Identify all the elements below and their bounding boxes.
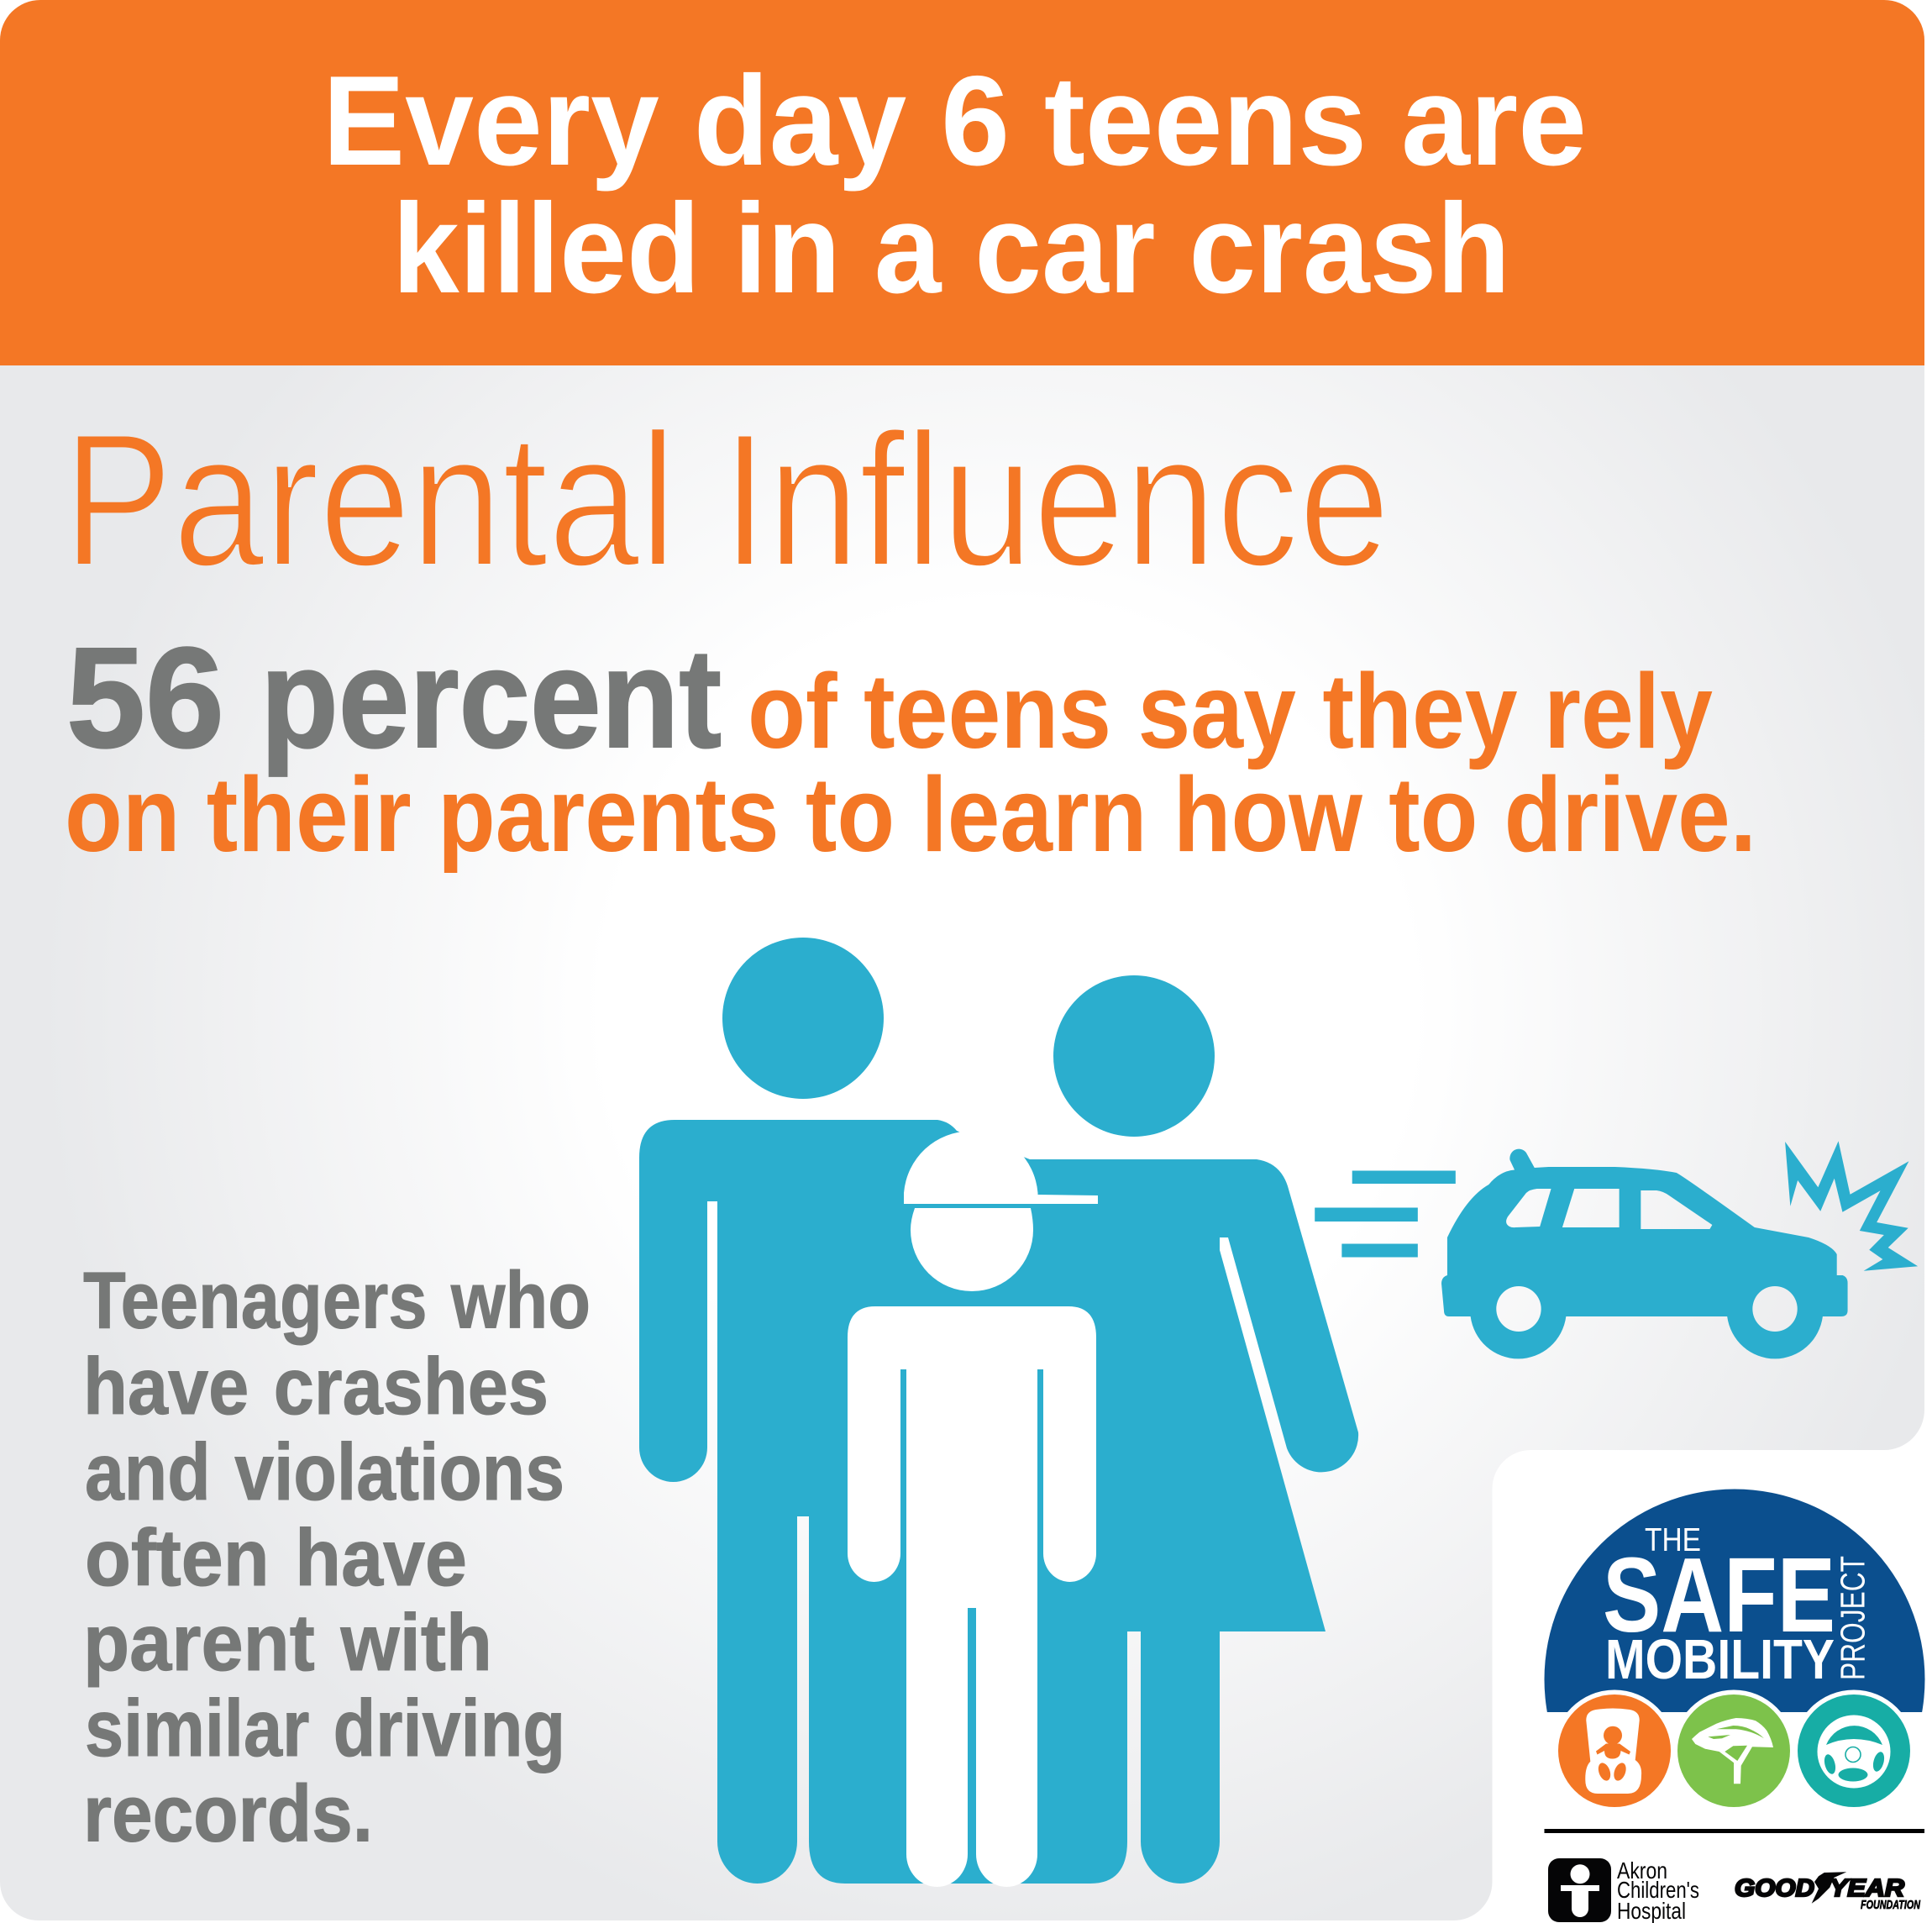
logo: The Safe Mobility Project — [1544, 1489, 1925, 1807]
logo: Akron Children's Hospital: Akron — [1617, 1857, 1667, 1884]
statistic text block — [65, 618, 1756, 874]
icon: father head — [722, 938, 884, 1099]
logo: Goodyear Foundation: YEAR — [1830, 1875, 1904, 1902]
logo semicircle — [1544, 1489, 1925, 1712]
divider line — [1544, 1829, 1924, 1833]
statistic: percent: percent — [260, 619, 722, 777]
icon: car — [1441, 1141, 1918, 1358]
header banner — [0, 0, 1924, 365]
logo: Akron Children's Hospital: Children's — [1617, 1877, 1699, 1903]
logo word: SAFE: SAFE — [1603, 1536, 1835, 1654]
text block: teenagers with crashes — [83, 1255, 591, 1858]
car body — [1441, 1149, 1848, 1358]
icon: Akron child symbol — [1548, 1858, 1611, 1922]
child body with arms and legs — [848, 1306, 1096, 1887]
title line 1: Every day 6 teens are — [323, 50, 1587, 192]
text block: teenagers with crashes: and violations — [85, 1427, 564, 1517]
logo: Akron Children's Hospital — [1548, 1857, 1699, 1923]
logo word: PROJECT: PROJECT — [1833, 1556, 1872, 1680]
icon: parents body silhouette — [639, 1120, 1358, 1884]
child face — [911, 1208, 1033, 1291]
logo: Goodyear Foundation — [1735, 1872, 1921, 1912]
text block: teenagers with crashes: similar driving — [85, 1684, 565, 1773]
crash burst — [1785, 1141, 1918, 1271]
icon: child silhouette — [848, 1131, 1098, 1887]
text block: teenagers with crashes: Teenagers who — [83, 1255, 591, 1346]
text block: teenagers with crashes: records. — [83, 1769, 373, 1858]
icon: bike helmet — [1677, 1694, 1790, 1807]
text block: teenagers with crashes: parent with — [83, 1598, 492, 1688]
logo: Goodyear Foundation: GOOD — [1735, 1875, 1814, 1902]
title line 2: killed in a car crash — [392, 177, 1510, 320]
statistic line 1: of teens say they rely — [748, 652, 1713, 770]
child cap — [904, 1131, 1098, 1204]
text block: teenagers with crashes: have crashes — [83, 1342, 549, 1432]
icon: winged foot — [1812, 1872, 1846, 1904]
icon: family of pictogram figures — [639, 938, 1358, 1887]
statistic line 2: on their parents to learn how to drive. — [65, 755, 1756, 874]
logo word: THE: THE — [1645, 1522, 1701, 1558]
heading: Parental Influence: Parental Influence — [63, 393, 1390, 606]
statistic: 56: 56 — [66, 618, 224, 778]
logo word: MOBILITY: MOBILITY — [1605, 1628, 1835, 1691]
icon rings — [1554, 1690, 1915, 1811]
icon: child car seat — [1558, 1694, 1671, 1807]
icon: motion lines — [1315, 1171, 1456, 1257]
icon: mother head — [1053, 975, 1215, 1137]
text block: teenagers with crashes: often have — [85, 1513, 467, 1603]
icon: steering wheel — [1798, 1694, 1910, 1807]
